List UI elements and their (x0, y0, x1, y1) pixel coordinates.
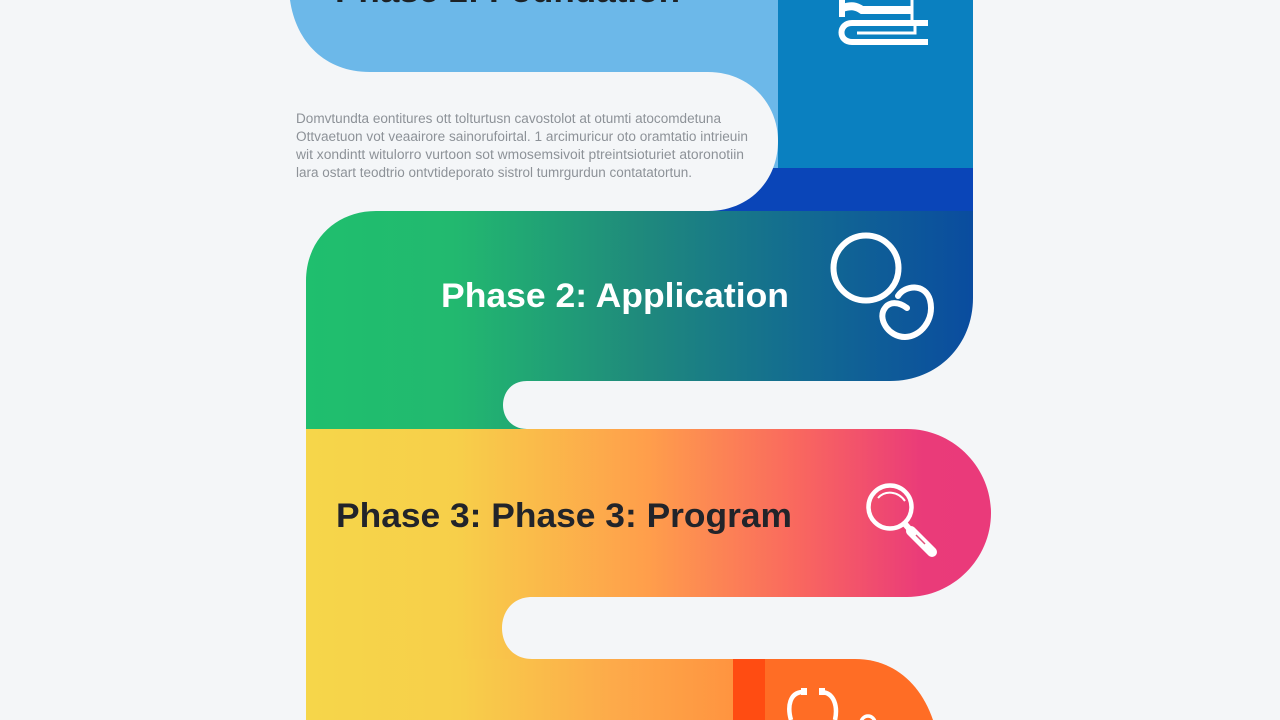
body text: lara ostart teodtrio ontvtideporato sistrol tumrgurdun contatatortun. (296, 165, 692, 180)
right band (765, 659, 933, 720)
panel: phase 3 program (306, 429, 991, 659)
left band (306, 659, 733, 720)
heading: phase 2: Phase 2: Application (441, 277, 789, 315)
dark blue strip (700, 168, 973, 211)
body text (295, 111, 748, 180)
icon: stethoscope (789, 688, 875, 720)
orange strip (733, 659, 765, 720)
body text: Domvtundta eontitures ott tolturtusn cavostolot at otumti atocomdetuna (296, 111, 721, 126)
gradient band (306, 429, 991, 659)
body text: wit xondintt witulorro vurtoon sot wmosemsivoit ptreintsioturiet atoronotiin (295, 147, 744, 162)
icon: rings (834, 236, 931, 337)
white notch (290, 72, 778, 211)
panel: phase 1 foundation (290, 0, 973, 211)
light blue band (290, 0, 778, 168)
panel: phase 2 application (306, 211, 973, 429)
icon: books (842, 0, 928, 42)
panel: phase 4 (306, 659, 933, 720)
icon: magnifying glass (868, 486, 932, 552)
heading: phase 3: Phase 3: Phase 3: Program (336, 497, 792, 535)
green band (306, 211, 973, 429)
blue column (778, 0, 973, 168)
body text: Ottvaetuon vot veaairore sainorufoirtal. 1 arcimuricur oto oramtatio intrieuin (296, 129, 748, 144)
